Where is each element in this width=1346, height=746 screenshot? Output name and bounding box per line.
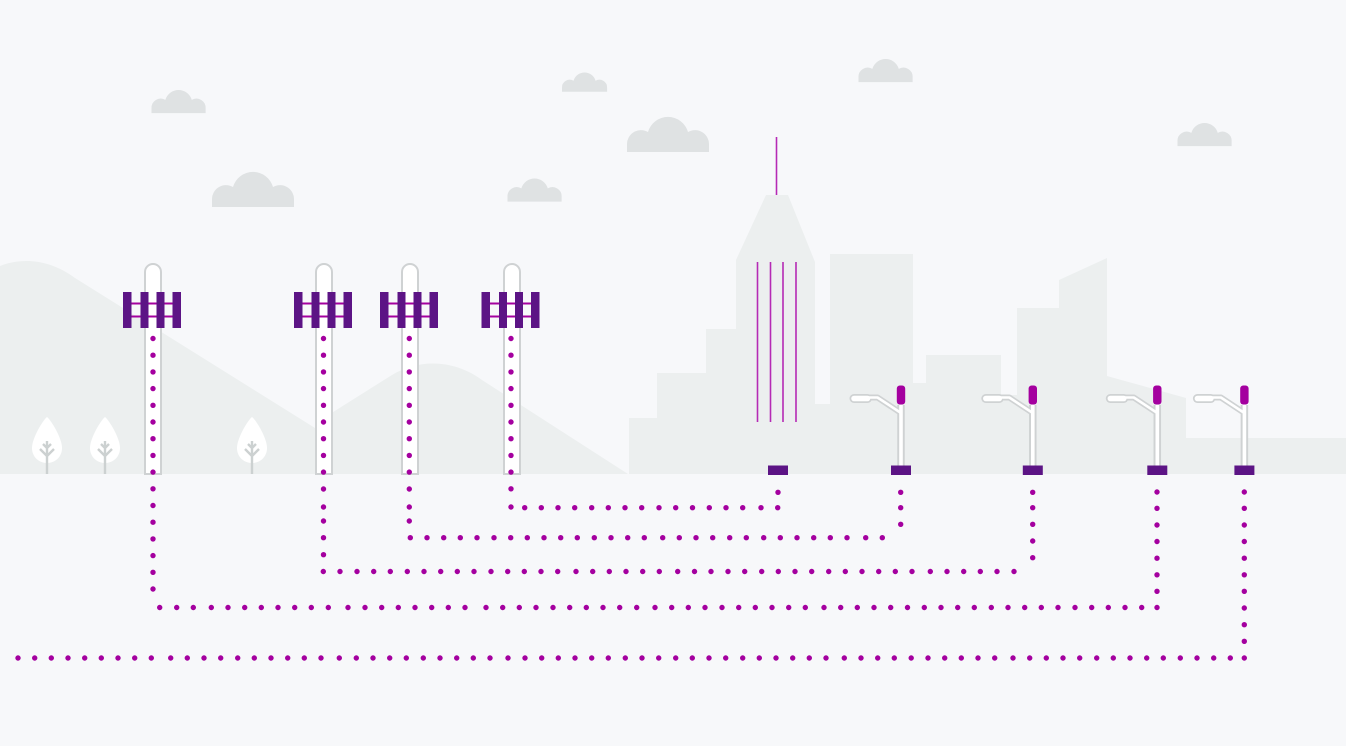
cloud 7 [1177,123,1232,146]
cell tower 2 [294,264,352,474]
cloud 3 [507,178,562,202]
dotted route: street light 4 to off-page [18,492,1244,658]
cloud 1 [151,90,206,113]
cell tower 1 [123,264,181,474]
tree 1 [32,417,62,474]
street light 1 [854,386,911,475]
cloud 4 [562,72,607,92]
building cables [758,262,796,422]
tree 2 [90,417,120,474]
dotted route: tower 4 to building [511,338,778,508]
dotted route: tower 1 to street light 3 [153,338,1157,608]
building base [768,466,788,475]
cloud 6 [858,59,913,82]
street light 4 [1197,386,1254,475]
street light 3 [1110,386,1167,475]
cloud 5 [627,117,709,152]
dotted route: tower 3 to street light 1 [409,338,901,538]
tree 3 [237,417,267,474]
dotted route: tower 2 to street light 2 [323,338,1033,572]
street light 2 [986,386,1043,475]
cell tower 3 [380,264,438,474]
city skyline [629,195,1346,474]
cell tower 4 [482,264,540,474]
building antenna [776,137,778,195]
cloud 2 [212,172,294,207]
hills [0,261,628,474]
